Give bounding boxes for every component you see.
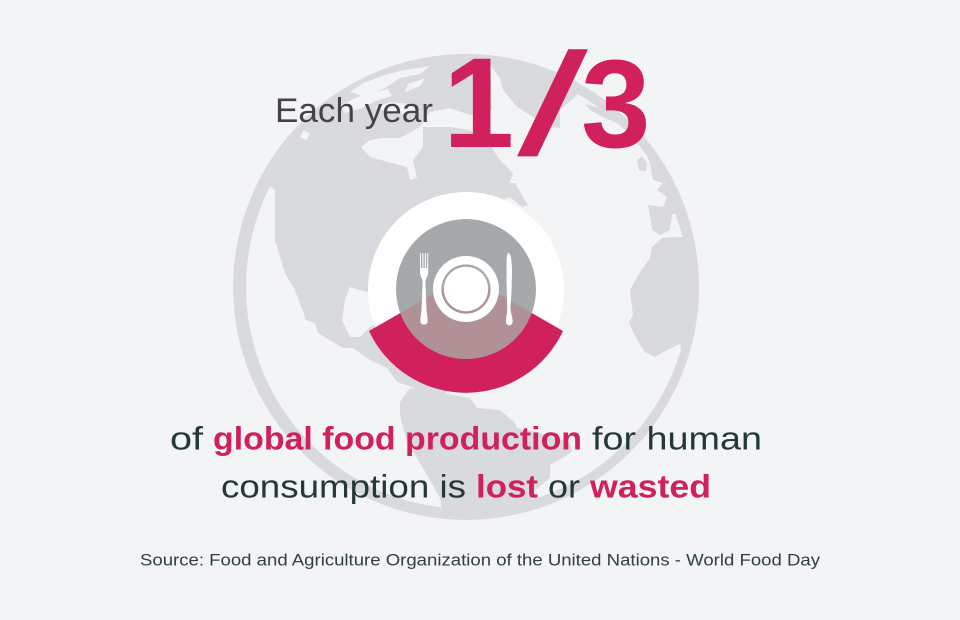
line 2: or <box>548 468 580 504</box>
slash: / <box>517 24 588 187</box>
Gulf of California <box>293 288 304 317</box>
Greenland <box>491 56 584 128</box>
Newfoundland <box>504 183 528 207</box>
North America with Arctic <box>262 45 513 400</box>
icon: plate <box>433 256 499 322</box>
British Isles <box>637 156 647 171</box>
pink overlap <box>400 294 532 359</box>
continents <box>262 45 702 512</box>
crimson one-third wedge <box>369 275 563 393</box>
Arctic channels <box>300 66 430 140</box>
Africa <box>629 237 702 357</box>
icon: knife <box>506 253 513 325</box>
icon: fork <box>420 253 428 325</box>
line 2: wasted <box>589 468 711 504</box>
numeral 1: 1 <box>443 32 514 175</box>
grey inner disc <box>396 219 536 359</box>
globe with continents <box>233 45 702 520</box>
line 2: consumption is <box>221 468 466 504</box>
Gulf of Mexico <box>342 287 374 337</box>
Europe and North Africa limb <box>646 143 694 237</box>
plate icon: one third chart <box>368 192 564 393</box>
line 1: of <box>170 420 203 456</box>
line 1: for human <box>592 420 762 456</box>
heading: Each year: Each year <box>275 92 433 130</box>
ocean cutouts <box>293 66 430 337</box>
statement text <box>170 420 762 504</box>
line 1: global food production <box>213 420 582 456</box>
line 2: lost <box>476 468 538 504</box>
globe ring <box>233 54 699 520</box>
numeral 3: 3 <box>581 35 651 174</box>
infographic canvas <box>140 49 820 569</box>
South America <box>400 388 572 512</box>
line 2 <box>221 468 711 504</box>
Iceland <box>585 104 618 124</box>
source line: Source: Food and Agriculture Organization of the United Nations - World Food Day <box>140 551 821 570</box>
big fraction 1/3 <box>443 24 651 187</box>
white disc <box>368 192 564 388</box>
line 1 <box>170 420 762 456</box>
